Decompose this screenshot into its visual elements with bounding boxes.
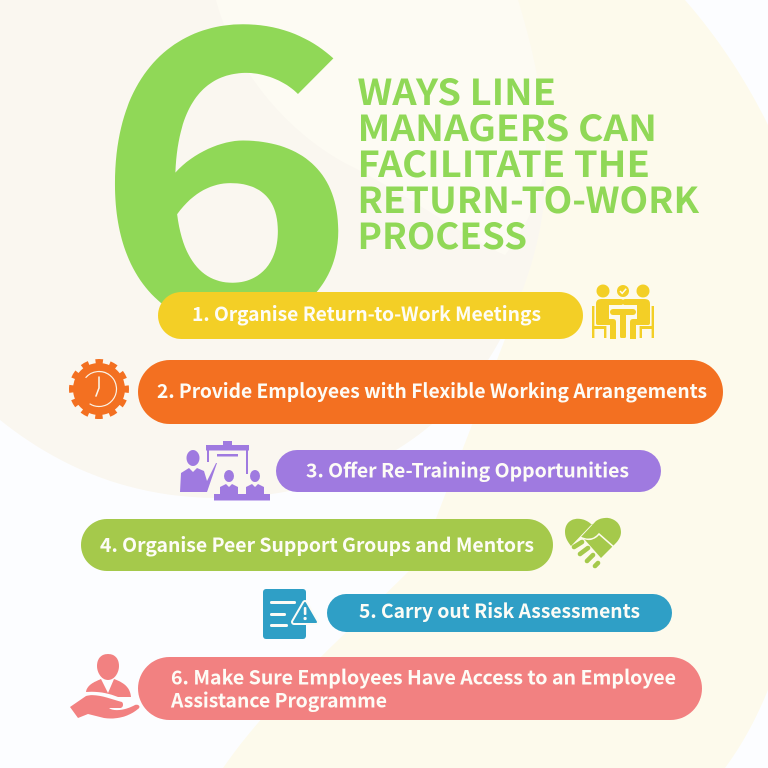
step 2 pill: 2. Provide Employees with Flexible Working Arrangements — [157, 375, 707, 404]
icon: clock gear — [72, 362, 126, 416]
step 1 pill — [158, 292, 583, 339]
title: MANAGERS CAN — [358, 100, 657, 152]
step 5 pill — [327, 594, 672, 632]
step 2 pill — [138, 360, 723, 424]
step 6 pill: Assistance Programme — [170, 684, 387, 714]
step 5 pill: 5. Carry out Risk Assessments — [359, 595, 640, 624]
title: RETURN-TO-WORK — [358, 172, 699, 224]
step 1 pill: 1. Organise Return-to-Work Meetings — [192, 298, 541, 327]
icon: handshake heart — [565, 518, 621, 566]
step 6 pill — [138, 657, 702, 720]
step 4 pill — [81, 519, 553, 571]
title: PROCESS — [358, 208, 527, 260]
step 4 pill: 4. Organise Peer Support Groups and Mentors — [100, 529, 534, 558]
icon: risk assessment document — [263, 589, 316, 639]
icon: caring hand holding a person — [70, 654, 139, 719]
title — [358, 64, 699, 260]
icon: meeting at a table — [592, 284, 654, 339]
title: FACILITATE THE — [358, 136, 650, 188]
icon: training presentation — [180, 441, 270, 500]
title: WAYS LINE — [358, 64, 556, 116]
step 6 pill: 6. Make Sure Employees Have Access to an Employee — [171, 662, 676, 690]
step 3 pill — [276, 450, 661, 492]
step 3 pill: 3. Offer Re-Training Opportunities — [306, 454, 629, 484]
